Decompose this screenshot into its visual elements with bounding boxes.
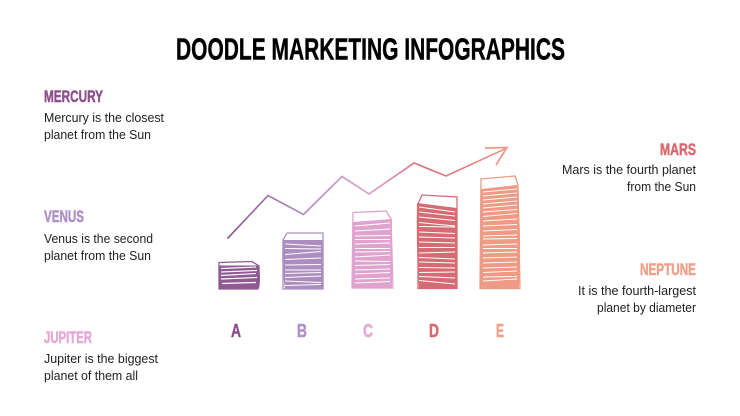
text block: Venus (44, 208, 153, 263)
title: DOODLE MARKETING INFOGRAPHICS (176, 32, 565, 66)
text block: Mercury: planet from the Sun (44, 128, 151, 142)
text block: Neptune: planet by diameter (597, 301, 696, 315)
axis labels: B (297, 321, 307, 341)
axis labels (231, 321, 504, 341)
arrow: rising trend line (228, 148, 507, 238)
text block: Neptune: NEPTUNE (640, 261, 696, 279)
text block: Venus: planet from the Sun (44, 249, 151, 263)
text block: Neptune: It is the fourth-largest (578, 284, 696, 298)
text block: Mars: MARS (660, 141, 696, 159)
text block: Jupiter: Jupiter is the biggest (44, 352, 158, 366)
text block: Mercury: MERCURY (44, 88, 103, 106)
text block: Mercury (44, 88, 164, 142)
bar B (282, 233, 323, 289)
bar chart (219, 176, 520, 289)
text block: Mars: from the Sun (627, 180, 696, 194)
bar E (480, 176, 520, 288)
text block: Jupiter (44, 329, 158, 383)
text block: Venus: Venus is the second (44, 232, 153, 246)
axis labels: D (429, 321, 439, 341)
text block: Jupiter: planet of them all (44, 369, 138, 383)
text block: Neptune (578, 261, 696, 315)
bar D (417, 195, 457, 288)
text block: Mars (562, 141, 696, 194)
axis labels: C (363, 321, 373, 341)
text block: Jupiter: JUPITER (44, 329, 92, 347)
text block: Mars: Mars is the fourth planet (562, 163, 696, 177)
bar A (219, 262, 260, 289)
bar C (352, 211, 393, 288)
axis labels: A (231, 321, 241, 341)
text block: Mercury: Mercury is the closest (44, 111, 164, 125)
text block: Venus: VENUS (44, 208, 84, 226)
axis labels: E (496, 321, 504, 341)
